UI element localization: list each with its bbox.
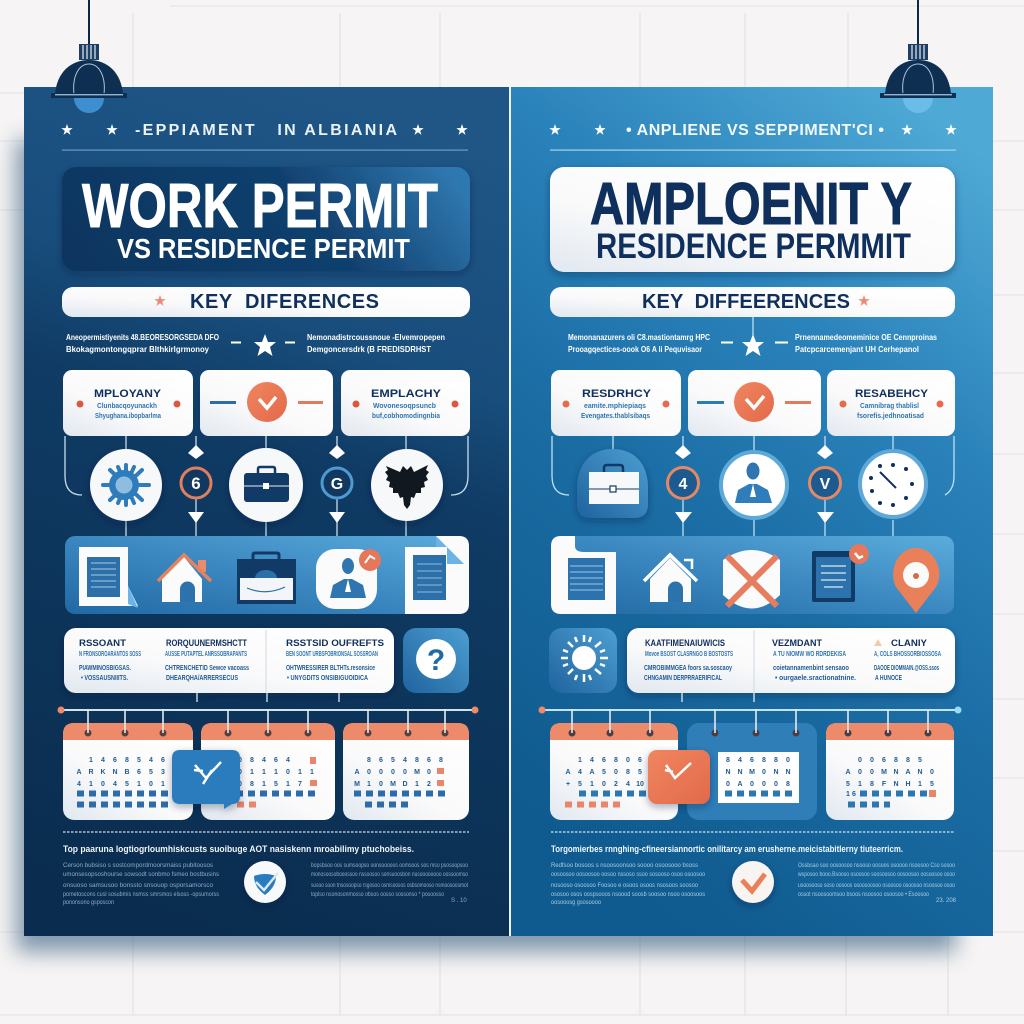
calendar 3: M10MD12: [354, 781, 431, 788]
icon: person circle: [721, 452, 787, 518]
summary text: [551, 832, 957, 906]
calendar 3: [826, 723, 954, 820]
requirements box: BEN SOONT URBSFOBRIONSAL SOSSROAN: [286, 651, 378, 658]
requirements box: RSSTSID OUFREFTS: [286, 638, 384, 649]
calendar 2: [201, 723, 335, 820]
icon: orange ring badge: 6: [191, 474, 201, 493]
icon: albanian eagle circle: [371, 449, 443, 521]
title box: WORK PERMIT: [82, 172, 438, 241]
card: employany: [63, 370, 193, 436]
icon: person tile: [316, 549, 381, 609]
connector lines: [65, 436, 468, 536]
icon: house: [644, 555, 697, 602]
calendar 3: A00MNAN0: [845, 769, 934, 776]
card: emplachy: [341, 370, 470, 436]
intro text with star: Bkokagmontongqprar BIthkirlgrmonoy: [66, 344, 209, 354]
header strip: stars and subtitle: [549, 122, 957, 151]
calendar 2: 0815171: [238, 781, 314, 788]
summary text: Top paaruna logtiogrloumhiskcusts suoibuge AOT nasiskenn mroabilimy ptuchobeiss.: [63, 844, 414, 855]
summary text: Torgomierbes rnnghing-cfineersiannortic onilitarcy am erusherne.meicistabitlerny tiuteerricm.: [551, 844, 903, 855]
summary text: 23. 208: [936, 898, 957, 904]
calendar rings: [568, 709, 932, 736]
requirements box: KAATFIMENAIUWICIS: [645, 638, 725, 649]
calendar 3: [343, 723, 469, 820]
summary text: umonsesopsoshourse sowsodt sonbmo fsmeo bostbusins: [63, 872, 219, 878]
calendar 3: 16: [846, 791, 856, 798]
card: employany: Shyughana.ibopbarlma: [95, 413, 161, 420]
arrows between rows: [675, 445, 834, 523]
requirements box: RSSOANT: [79, 638, 126, 649]
intro text with star: Prnennamedeomeminice OE Cennproinas: [795, 332, 937, 342]
summary text: susoo soon tnsosoopso rsgosoo osmsoosos osbsomooso nsmoosoosmot: [311, 883, 468, 889]
requirements box: PIAWMINOSBIGSAS.: [79, 665, 131, 672]
card: resabehcy: [827, 370, 955, 436]
icon: orange ring check: V: [820, 476, 831, 493]
requirements box: CLANIY: [891, 638, 928, 649]
icon band: [65, 536, 469, 614]
calendar 1: 1468546: [89, 757, 165, 764]
calendar rings: [84, 709, 448, 736]
card: resabehcy: RESABEHCY: [855, 388, 929, 400]
icon: orange ring badge: 4: [679, 476, 688, 493]
calendar 1: ARKNB653: [76, 769, 165, 776]
requirements box: VEZMDANT: [772, 638, 822, 649]
icon: map pin: [893, 548, 939, 613]
calendar 3: 006885: [858, 757, 922, 764]
summary text: S . 10: [451, 898, 467, 904]
requirements box: [627, 628, 955, 693]
calendar 2: 0A0008: [726, 781, 790, 788]
icon: briefcase circle: [229, 448, 303, 522]
icon: clock: [860, 451, 926, 517]
calendar 2: [687, 723, 817, 820]
panel: employment poster: [511, 0, 993, 936]
card: resabehcy: Camnibrag thablisl: [860, 403, 919, 410]
card: emplachy: Wovonesoqpsuncb: [373, 403, 436, 410]
icon: blue ring badge: G: [331, 476, 343, 493]
icon: left hanging lamp: [51, 0, 127, 113]
icon: blue ring badge: [322, 468, 352, 498]
icon: briefcase: [237, 553, 296, 604]
header strip: stars and subtitle: [61, 122, 468, 151]
summary text: pononsono gsposcon: [63, 900, 114, 906]
card: emplachy: buf,cobhomodingnbia: [372, 413, 440, 420]
summary text: [63, 832, 469, 906]
key differences bar: [62, 287, 470, 317]
card: resdrhcy: [551, 370, 681, 436]
icon: crossed plate: [723, 550, 780, 608]
summary text: wsposoo booo.Bsooso osoosoo soosoosoo oosoosoo oosoosoo osoo: [797, 872, 956, 878]
card: resdrhcy: Evengates.thablsibaqs: [581, 413, 650, 420]
calendar 2: 846880: [726, 757, 790, 764]
intro text with star: Aneopermistiyenits 48.BEORESORGSEDA DFO: [66, 332, 219, 342]
icon: question tile: [403, 628, 469, 693]
card: emplachy: EMPLACHY: [371, 388, 442, 400]
header strip: stars and subtitle: -EPPIAMENT IN ALBIANIA: [135, 122, 397, 139]
summary text: Redfsoo bosoos s nsoosoonsoo soooo osoosooo bsoss: [551, 863, 698, 869]
calendar 1: [63, 723, 193, 820]
panel: work permit poster: [24, 0, 509, 936]
requirements box: DHEARQHA/ARRERSECUS: [166, 675, 238, 682]
arrows between rows: [188, 445, 345, 523]
card: approval check: [688, 370, 821, 436]
title box: RESIDENCE PERMMIT: [596, 227, 911, 266]
calendar 1: 41045101: [77, 781, 165, 788]
intro text with star: Nemonadistrcoussnoue -Elvemropepen: [307, 332, 445, 342]
icon: orange ring badge: [181, 468, 211, 498]
title box: [550, 167, 955, 272]
requirements box: [64, 628, 394, 693]
icon: orange ring badge: [668, 468, 698, 498]
requirements box: RORQUUNERMSHCTT: [166, 638, 247, 649]
icon: briefcase tile: [577, 449, 648, 518]
icon: question tile: ?: [427, 644, 445, 677]
summary text: monosoosobooossoo nssoosoo sonsuoosbon nusoooooooo oossoomso: [311, 872, 469, 878]
requirements box: DAOOE DIOMMAIN.@OSS.ssos: [874, 665, 939, 672]
summary text: Ossbsao soo oosoosoo nsooso oosoos osoooo nsoosoo Cso sosoo: [798, 863, 956, 869]
key differences bar: KEY DIFFEERENCES: [642, 291, 850, 313]
callout tile: [172, 750, 240, 809]
card: approval check: [200, 370, 333, 436]
calendar 3: A0000M0: [354, 769, 431, 776]
intro text with star: Prooagqectices-oook O6 A li Pequvisaor: [568, 344, 703, 354]
header strip: stars and subtitle: • ANPLIENE VS SEPPIMENT'CI •: [626, 122, 884, 139]
summary text: nosooso osoosoo Foosoo e osoos osoos nsosoos soosoo: [551, 883, 699, 889]
icon: blue check badge: [244, 861, 286, 903]
icon band: [551, 536, 954, 614]
summary text: pometoscons cusl sosubmis nsmss smrsmos elsoss -opsumorss: [63, 892, 219, 898]
intro text with star: Memonanazurers oli C8.mastiontamrg HPC: [568, 332, 710, 342]
calendar 1: [550, 723, 678, 820]
requirements box: • VOSSAUSNIIITS.: [81, 675, 128, 682]
requirements box: CHTRENCHETID Sewce vacoass: [165, 665, 249, 672]
calendar 1: A4A5085: [565, 769, 642, 776]
calendar 2: 0111011: [238, 769, 314, 776]
requirements box: • ourgaele.sractionatnine.: [775, 675, 856, 682]
icon: blue burst circle: [90, 449, 162, 521]
icon: orange ring check: [810, 468, 840, 498]
key differences bar: [550, 287, 955, 317]
timeline with rings: [538, 693, 962, 714]
calendar 2: NNM0NN: [725, 769, 791, 776]
icon: document right: [405, 536, 469, 614]
requirements box: coietannamenbint sensaoo: [773, 665, 849, 672]
summary text: Cerson bubsiso s sostcompordmoorsmaiss pubitoosos: [63, 863, 213, 869]
calendar 3: 518FNH15: [846, 781, 934, 788]
summary text: onsuoso samsusoo bonssto snsouop osporsamorsco: [63, 883, 214, 889]
icon: document: [551, 536, 616, 614]
icon: orange check badge: [732, 861, 774, 903]
calendar 2: 08464: [238, 757, 290, 764]
calendar 1: +5102410: [566, 781, 644, 788]
calendar 3: 8654868: [367, 757, 443, 764]
requirements box: • UNYGDITS ONSIBIGUOIDICA: [287, 675, 368, 682]
title box: [62, 167, 470, 271]
title box: VS RESIDENCE PERMIT: [117, 233, 410, 264]
card: resdrhcy: eamite.mphiepiaqs: [584, 403, 646, 410]
card: employany: Clunbacqoyunackh: [97, 403, 157, 410]
icon: document left: [79, 547, 138, 608]
icon: sun tile: [549, 628, 617, 693]
intro text with star: [66, 332, 445, 356]
requirements box: A HUNOCE: [875, 675, 902, 682]
card: resdrhcy: RESDRHCY: [582, 388, 652, 400]
summary text: toplso nsonosonmosso obsos oosso sossonso * posoosso: [311, 892, 445, 898]
icon: dark document: [812, 544, 869, 602]
requirements box: Movoe BSOST CLASRNGO B BOSTOSTS: [645, 651, 733, 658]
card: resabehcy: fsorefis.jedhnoatisad: [857, 413, 924, 420]
card: employany: MPLOYANY: [94, 388, 162, 400]
summary text: oosooosg gsosoooo: [551, 900, 602, 906]
requirements box: OHTWRESSIRER BLTHTs.resonsice: [286, 665, 375, 672]
callout tile: [648, 750, 710, 804]
requirements box: A, COLS BHOSSORBIOSSOSA: [874, 651, 941, 658]
title box: AMPLOENIT Y: [590, 171, 912, 237]
requirements box: CMROBIMMGEA foors sa.soscaoy: [644, 665, 732, 672]
calendar 1: 146806: [578, 757, 642, 764]
summary text: bopsbsoo oos sumsoopso oonsooooos oomsoos sos mso psosoopsoo: [311, 863, 469, 869]
icon: right hanging lamp: [880, 0, 956, 113]
summary text: oosoosoo oosoosoo oosoo nssoso ssoo sosooso osoo osoosoo: [551, 872, 706, 878]
key differences bar: KEY DIFERENCES: [190, 291, 379, 313]
summary text: usoosooso soso oosoos osoosoosoo osoosoo osoosoo nsoosoo osoo: [798, 883, 956, 889]
requirements box: CHNGAMIN DERPRRAERIFICAL: [644, 675, 723, 682]
intro text with star: Demgoncersdrk (B FREDISDRHST: [307, 344, 432, 354]
requirements box: A TU NIOMW WO RDRDEKISA: [773, 651, 846, 658]
requirements box: N FRONSOROARANTOS SOSS: [79, 651, 141, 658]
timeline with rings: [58, 693, 478, 714]
intro text with star: [568, 317, 937, 356]
summary text: ossot nsoosoomsoo bsoos nsoosoo osoosoo • Esoosoo: [798, 892, 930, 898]
intro text with star: Patcpcarcemenjant UH Cerhepanol: [795, 344, 919, 354]
icon: house: [158, 555, 211, 602]
requirements box: AUSSE PUTAPTEL ANRSSOBRAPANTS: [165, 651, 247, 658]
connector lines: [552, 436, 954, 536]
summary text: ososoo osos oospsooos nsoood soosb soosoo nsoo osoosoos: [551, 892, 705, 898]
